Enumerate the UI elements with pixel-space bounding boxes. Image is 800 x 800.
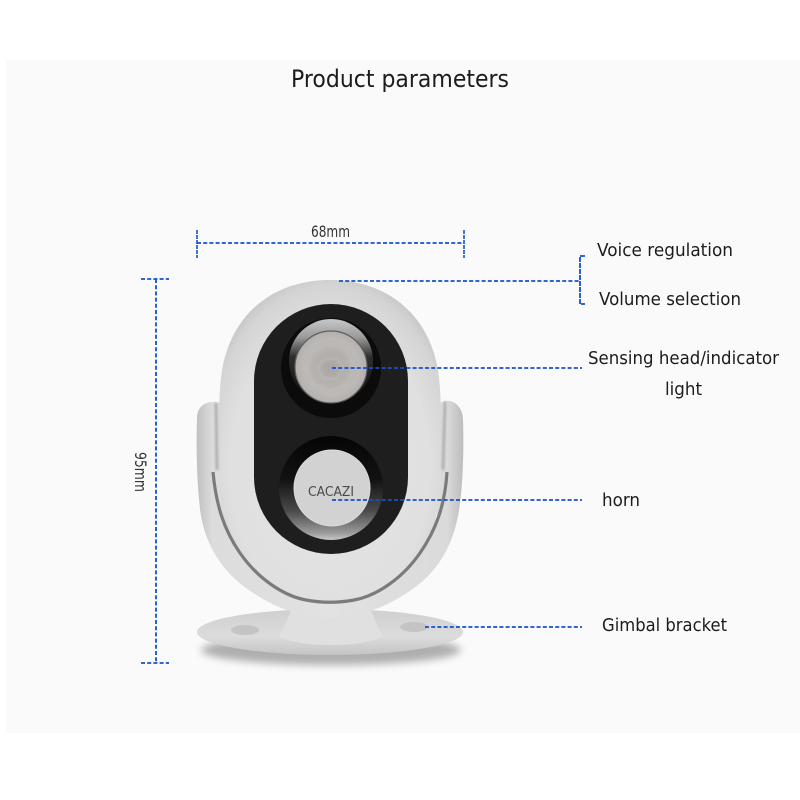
height dimension: 95mm: 95mm [131,452,150,492]
horn cap [294,450,370,526]
title: Product parameters [291,65,509,93]
sensing head lens [295,331,367,403]
callout: voice regulation and volume selection: Voice regulation [597,240,733,261]
swivel arms and lower shell [197,401,463,618]
width dimension: 68mm: 68mm [311,222,350,241]
base shadow [201,635,461,665]
gimbal bracket base [197,609,463,655]
main body shell [219,280,441,603]
arm inner seams [216,402,445,470]
sensing head ring [281,318,381,418]
sensing head collar [289,319,373,403]
brand label: CACAZI [308,485,354,500]
black front panel [254,304,408,554]
callout: gimbal bracket: Gimbal bracket [602,615,727,636]
width dimension: 68mm [197,222,464,258]
horn ring [279,436,383,540]
callout: sensing head / indicator light: light [665,379,702,400]
groove line around the body [213,472,447,602]
callout: horn: horn [602,490,640,511]
base screw holes [231,622,428,635]
lens facets [306,344,354,391]
product illustration: motion sensor [197,280,463,665]
callout: sensing head / indicator light: Sensing head/indicator [588,348,780,369]
callout: sensing head / indicator light [332,348,780,400]
base neck [279,608,383,645]
callout: voice regulation and volume selection: Volume selection [599,289,741,310]
height dimension: 95mm [131,279,169,663]
callout: voice regulation and volume selection [339,240,741,310]
